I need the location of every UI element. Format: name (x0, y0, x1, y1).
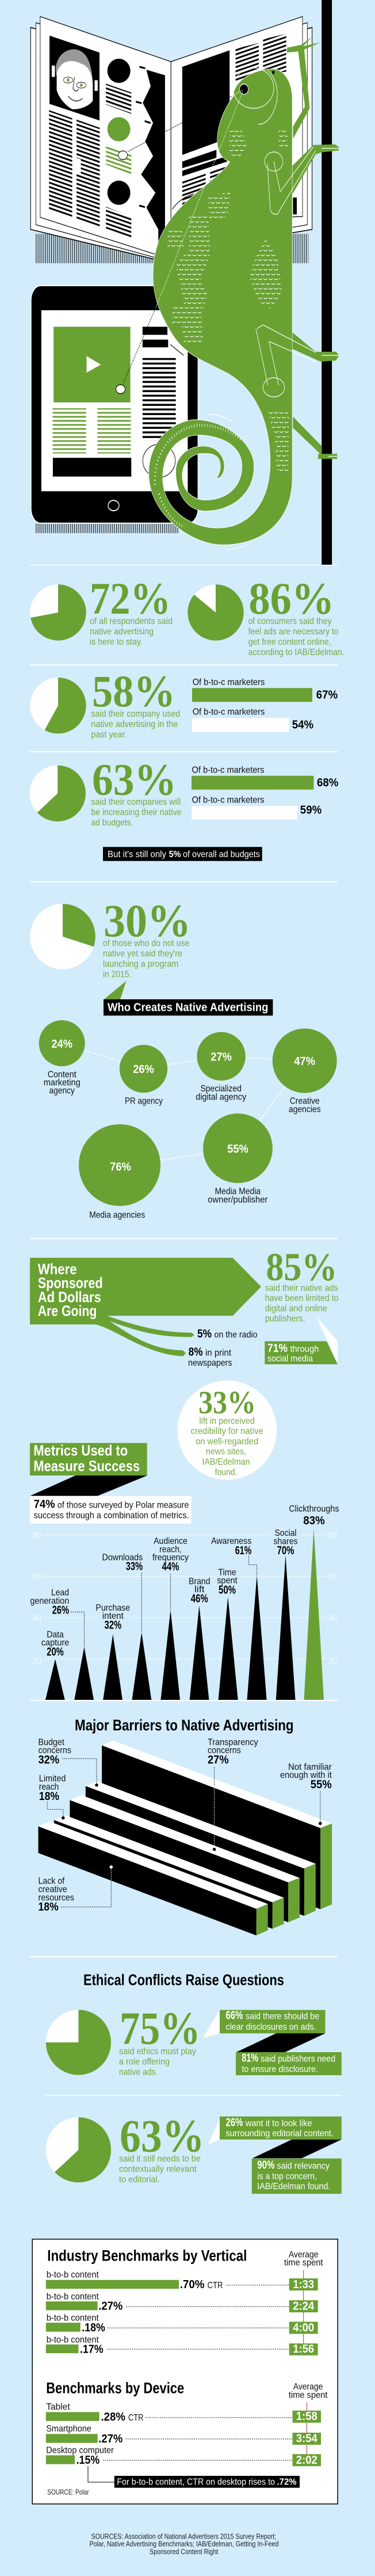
chart: isometric barrier steps: Not familiar (288, 1762, 332, 1772)
chart: metrics spikes: 40 (32, 1613, 41, 1623)
callouts: 26 and 90 percent: 90% (257, 2159, 275, 2172)
chart: isometric barrier steps: Lack of (38, 1877, 65, 1886)
callouts: 66 and 81 percent: 66% (225, 2010, 243, 2022)
industry benchmarks by vertical: 2:24 (293, 2300, 315, 2313)
chart: metrics spikes: Brand (189, 1577, 210, 1586)
bubble: PR agency: PR agency (125, 1096, 163, 1106)
benchmarks by device: Desktop computer (46, 2445, 114, 2455)
footer sources: Sponsored Content Right (150, 2547, 219, 2556)
stat bubble: 33 percent lift: IAB/Edelman (202, 1458, 250, 1467)
stat: 30 percent: in 2015. (103, 969, 131, 979)
stat: 72 percent: of all respondents said (90, 617, 173, 626)
bubble: media agencies: Media agencies (89, 1210, 145, 1220)
chart: metrics spikes: intent (102, 1611, 124, 1621)
label: 8 percent newspapers: newspapers (188, 1359, 232, 1368)
bubble: specialized digital agency (196, 1032, 246, 1102)
chart: isometric barrier steps: resources (38, 1893, 74, 1902)
chart: isometric barrier steps (38, 1737, 332, 1935)
industry benchmarks by vertical: b-to-b content (47, 2292, 99, 2301)
bubble: media owner/publisher: Media Media (215, 1187, 261, 1197)
stat: 72 percent: is here to stay. (90, 637, 143, 647)
callouts: 26 and 90 percent (208, 2116, 342, 2194)
stat: 63 percent relevance: contextually relevant (119, 2164, 197, 2174)
bubble: content marketing agency: marketing (44, 1078, 81, 1088)
callout: 74 percent: success through a combination of metrics. (34, 1511, 189, 1521)
stat: 85 percent: said their native ads (265, 1283, 338, 1293)
stat: 63 percent relevance: said it still needs to be (119, 2154, 201, 2164)
bubble connectors (85, 1051, 285, 1160)
bars: 67 and 54 percent: Of b-to-c marketers (193, 707, 265, 717)
chart: metrics spikes: reach, (159, 1544, 182, 1554)
chart: isometric barrier steps: concerns (208, 1746, 241, 1756)
stat: 75 percent ethics: a role offering (119, 2057, 170, 2067)
stat: 85 percent: publishers. (265, 1314, 305, 1324)
stat: 30 percent: launching a program (103, 959, 178, 969)
bubble: creative agencies: 47% (294, 1055, 315, 1068)
stat: 63 percent budgets: said their companies will (91, 797, 181, 807)
callouts: 26 and 90 percent: is a top concern, (257, 2171, 317, 2181)
stat: 72 percent (30, 573, 173, 647)
chart: metrics spikes: 61% (235, 1544, 252, 1557)
chart: metrics spikes: 26% (52, 1604, 69, 1616)
stat: 72 percent: native advertising (90, 627, 154, 637)
callouts: 26 and 90 percent: surrounding editorial content. (225, 2129, 334, 2139)
stat: 85 percent: have been limited to (265, 1293, 339, 1303)
industry benchmarks by vertical: time spent (284, 2258, 323, 2268)
benchmarks by device: Benchmarks by Device (46, 2379, 184, 2396)
callouts: 26 and 90 percent: want it to look like (245, 2118, 312, 2128)
chart: metrics spikes: Lead (51, 1588, 69, 1598)
chart: metrics spikes: generation (30, 1596, 69, 1606)
stat: 86 percent: feel ads are necessary to (248, 627, 339, 637)
bubble: media agencies: 76% (110, 1160, 131, 1173)
chart: metrics spikes: 60 (328, 1572, 337, 1581)
stat: 86 percent: according to IAB/Edelman. (248, 648, 345, 657)
chart: metrics spikes: 83% (303, 1515, 325, 1527)
industry benchmarks by vertical: CTR (207, 2281, 223, 2290)
industry benchmarks by vertical: b-to-b content (47, 2270, 99, 2280)
callout: 5 percent of budgets: But it's still only (108, 850, 166, 859)
chart: metrics spikes: 80 (328, 1531, 337, 1540)
benchmarks by device: 1:58 (296, 2410, 317, 2423)
bubble: media owner/publisher: 55% (227, 1143, 248, 1156)
stat: 63 percent budgets (29, 755, 181, 828)
industry benchmarks by vertical: .27% (98, 2300, 123, 2313)
tablet (31, 286, 198, 528)
chart: metrics spikes: 70% (277, 1544, 294, 1557)
industry benchmarks by vertical: 1:33 (293, 2278, 314, 2291)
chart: isometric barrier steps: reach (39, 1782, 59, 1792)
label: 8 percent newspapers (188, 1346, 232, 1368)
chart: metrics spikes: Clickthroughs (289, 1504, 339, 1514)
chart: metrics spikes: 46% (191, 1593, 208, 1605)
chart: isometric barrier steps: Limited (39, 1774, 66, 1784)
stat: 58 percent: native advertising in the (91, 720, 178, 729)
magazine (30, 17, 312, 259)
bubble: media owner/publisher: owner/publisher (208, 1195, 268, 1205)
bars: 67 and 54 percent: 54% (292, 718, 313, 731)
stat: 63 percent relevance: 63% (120, 2111, 205, 2162)
industry benchmarks by vertical: .70% (180, 2278, 205, 2291)
callout: 74 percent (30, 1496, 192, 1524)
bubble: PR agency (120, 1045, 167, 1106)
heading: ethical conflicts: Ethical Conflicts Raise Questions (83, 1971, 284, 1988)
footer sources: Polar, Native Advertising Benchmarks; IAB/Edelman, Getting In-Feed (90, 2540, 278, 2548)
bars: 67 and 54 percent: 67% (316, 688, 338, 701)
industry benchmarks by vertical: Average (289, 2250, 319, 2259)
bubble: media owner/publisher (203, 1113, 273, 1205)
bubble: specialized digital agency: digital agency (196, 1093, 246, 1102)
stat: 63 percent budgets: ad budgets. (91, 818, 133, 828)
callout: desktop CTR (88, 2466, 300, 2488)
stat bubble: 33 percent lift: on well-regarded (196, 1437, 258, 1447)
stat: 58 percent (30, 666, 180, 740)
chart: isometric barrier steps: 55% (311, 1779, 332, 1791)
chart: isometric barrier steps: creative (38, 1885, 67, 1894)
label: 8 percent newspapers: 8% (189, 1346, 203, 1359)
industry benchmarks by vertical: 4:00 (293, 2322, 314, 2334)
stat: 72 percent: 72% (90, 573, 171, 623)
benchmarks by device: Average (293, 2382, 323, 2392)
chart: isometric barrier steps: concerns (38, 1746, 71, 1756)
callout: 5 percent of budgets: 5% (169, 850, 181, 859)
callout: desktop CTR: .72% (277, 2478, 297, 2487)
chart: metrics spikes (30, 1504, 339, 1701)
bubble: media agencies (79, 1124, 160, 1220)
stat: 63 percent relevance (46, 2111, 205, 2185)
benchmarks by device (46, 2379, 328, 2467)
chart: metrics spikes: Data (47, 1630, 64, 1639)
bars: 68 and 59 percent (192, 766, 339, 820)
chart: isometric barrier steps: 18% (39, 1790, 59, 1803)
stat: 30 percent (30, 896, 191, 999)
callouts: 66 and 81 percent: 81% (242, 2052, 258, 2065)
stat: 75 percent ethics (46, 2004, 201, 2077)
callouts: 26 and 90 percent: said relevancy (277, 2162, 330, 2171)
bars: 68 and 59 percent: Of b-to-c marketers (192, 766, 265, 775)
stat: 30 percent: of those who do not use (103, 938, 190, 948)
stat: 85 percent (265, 1245, 339, 1324)
chart: metrics spikes: Purchase (96, 1603, 130, 1613)
stat: 63 percent budgets: be increasing their native (91, 808, 181, 817)
footer sources (90, 2532, 278, 2556)
chart: metrics spikes: 20 (328, 1656, 337, 1665)
chart: isometric barrier steps: Budget (38, 1737, 64, 1747)
stat: 75 percent ethics: said ethics must play (119, 2046, 196, 2056)
callout: 71 percent social media: 71% (267, 1342, 288, 1354)
callouts: 66 and 81 percent: said there should be (246, 2012, 319, 2022)
callout: 71 percent social media (265, 1316, 338, 1364)
stat: 63 percent budgets: 63% (92, 755, 177, 805)
heading: who creates native advertising: Who Creates Native Advertising (108, 1002, 268, 1014)
stat: 86 percent: of consumers said they (248, 617, 332, 626)
stat: 85 percent: digital and online (265, 1304, 327, 1314)
chart: metrics spikes: 80 (32, 1531, 41, 1540)
benchmarks by device: time spent (289, 2390, 328, 2400)
footer sources: SOURCES: Association of National Advertisers 2015 Survey Report; (91, 2532, 276, 2540)
bubble: content marketing agency: agency (49, 1086, 75, 1096)
callout: desktop CTR: For b-to-b content, CTR on desktop rises to (117, 2478, 275, 2487)
industry benchmarks by vertical: .17% (80, 2343, 104, 2356)
chart: metrics spikes: spent (217, 1576, 238, 1586)
benchmarks by device: .15% (76, 2454, 100, 2467)
stat: 30 percent: 30% (104, 896, 191, 947)
chart: isometric barrier steps: 32% (38, 1753, 59, 1766)
industry benchmarks by vertical: b-to-b content (47, 2314, 99, 2323)
label: 5 percent radio: on the radio (214, 1330, 258, 1340)
callout: 71 percent social media: through (290, 1344, 319, 1354)
arrow: where sponsored ad dollars are going: Sponsored (38, 1274, 103, 1292)
bars: 67 and 54 percent (192, 678, 338, 732)
callouts: 66 and 81 percent: clear disclosures on ads. (225, 2022, 316, 2032)
chart: isometric barrier steps: 18% (38, 1901, 59, 1913)
industry benchmarks by vertical: .18% (82, 2322, 105, 2334)
pole (322, 0, 332, 565)
bubble: PR agency: 26% (133, 1063, 154, 1076)
chart: isometric barrier steps: 27% (208, 1753, 229, 1766)
chart: metrics spikes: Downloads (102, 1553, 143, 1562)
chart: metrics spikes: 20% (47, 1646, 64, 1658)
chart: isometric barrier steps: Transparency (208, 1737, 258, 1747)
benchmarks by device: CTR (128, 2413, 144, 2423)
stat bubble: 33 percent lift: lift in perceived (199, 1416, 255, 1426)
stat bubble: 33 percent lift (177, 1380, 277, 1480)
callout: 5 percent of budgets (103, 847, 262, 861)
benchmarks by device: 2:02 (296, 2454, 317, 2467)
bars: 68 and 59 percent: Of b-to-c marketers (192, 795, 265, 805)
chart: metrics spikes: 60 (32, 1572, 41, 1581)
benchmarks by device: .28% (101, 2411, 125, 2423)
bars: 68 and 59 percent: 68% (317, 777, 339, 789)
stat bubble: 33 percent lift: news sites, (206, 1447, 246, 1457)
arrow: where sponsored ad dollars are going (30, 1258, 261, 1356)
industry benchmarks by vertical: 1:56 (293, 2343, 314, 2356)
callouts: 66 and 81 percent: said publishers need (261, 2054, 335, 2064)
stat: 63 percent relevance: to editorial. (119, 2175, 160, 2185)
chart: metrics spikes: Awareness (211, 1536, 251, 1546)
bars: 67 and 54 percent: Of b-to-c marketers (193, 678, 265, 687)
callouts: 66 and 81 percent: to ensure disclosure. (242, 2064, 318, 2074)
chart: metrics spikes: 32% (105, 1619, 121, 1631)
stat bubble: 33 percent lift: found. (215, 1468, 237, 1478)
bubble: content marketing agency: 24% (51, 1038, 72, 1051)
stat: 75 percent ethics: 75% (120, 2004, 200, 2054)
stat bubble: 33 percent lift: 33% (198, 1385, 256, 1421)
chart: metrics spikes: Social (275, 1528, 297, 1538)
callouts: 26 and 90 percent: 26% (225, 2116, 243, 2129)
chart: metrics spikes: 50% (219, 1584, 236, 1596)
bubble: specialized digital agency: 27% (211, 1051, 232, 1063)
callout: 71 percent social media: social media (267, 1354, 313, 1364)
stat: 85 percent: 85% (266, 1245, 337, 1289)
stat: 86 percent: 86% (248, 573, 334, 623)
bubble: content marketing agency (39, 1020, 85, 1096)
bubble: specialized digital agency: Specialized (200, 1084, 242, 1094)
bubble: creative agencies: agencies (289, 1105, 321, 1114)
chart: metrics spikes: shares (274, 1536, 298, 1546)
stat bubble: 33 percent lift: credibility for native (191, 1426, 263, 1436)
stat: 58 percent: 58% (92, 666, 175, 716)
benchmarks by device: 3:54 (296, 2433, 318, 2445)
label: 8 percent newspapers: in print (205, 1348, 232, 1358)
source: Polar: SOURCE: Polar (47, 2487, 89, 2496)
industry benchmarks by vertical: Industry Benchmarks by Vertical (47, 2247, 247, 2265)
heading: metrics used to measure success: Measure Success (33, 1457, 140, 1474)
stat: 58 percent: past year. (91, 730, 127, 740)
chart: metrics spikes: Time (218, 1567, 236, 1577)
chart: metrics spikes: 40 (328, 1613, 337, 1623)
label: 5 percent radio: 5% (197, 1327, 212, 1340)
chameleon (149, 37, 339, 550)
callout: 74 percent: 74% (34, 1498, 55, 1510)
benchmarks by device: .27% (98, 2433, 123, 2445)
callouts: 66 and 81 percent (203, 2010, 342, 2075)
chart: metrics spikes: lift (194, 1585, 205, 1595)
arrow: where sponsored ad dollars are going: Where (38, 1260, 77, 1277)
heading: major barriers: Major Barriers to Native Advertising (75, 1717, 294, 1734)
callouts: 26 and 90 percent: IAB/Edelman found. (257, 2182, 330, 2191)
chart: isometric barrier steps: enough with it (280, 1771, 332, 1780)
sight lines and targets (116, 90, 243, 394)
stat: 75 percent ethics: native ads. (119, 2067, 158, 2077)
stat: 86 percent: get free content online, (248, 637, 331, 647)
chart: metrics spikes: capture (41, 1638, 69, 1648)
label: 5 percent radio (197, 1327, 258, 1340)
arrow: where sponsored ad dollars are going: Ad Dollars (38, 1288, 101, 1306)
callout: 74 percent: of those surveyed by Polar measure (58, 1500, 189, 1510)
benchmarks by device: Tablet (46, 2402, 70, 2412)
stat: 58 percent: said their company used (91, 709, 180, 719)
chart: metrics spikes: frequency (152, 1553, 189, 1562)
callout: 5 percent of budgets: of overall ad budgets (183, 850, 260, 859)
bubble: creative agencies: Creative (290, 1097, 320, 1106)
stat: 86 percent (188, 573, 345, 657)
chart: metrics spikes: 44% (162, 1561, 179, 1573)
bars: 68 and 59 percent: 59% (300, 804, 322, 816)
industry benchmarks by vertical (46, 2247, 323, 2356)
chart: metrics spikes: Audience (154, 1536, 188, 1546)
panel: benchmarks (32, 2239, 338, 2504)
chart: metrics spikes: 20 (32, 1656, 41, 1665)
arrow: where sponsored ad dollars are going: Are Going (38, 1302, 97, 1319)
heading: metrics used to measure success (30, 1442, 147, 1496)
benchmarks by device: Smartphone (46, 2424, 91, 2434)
hero illustration: chameleon reading magazine and tablet (30, 0, 339, 565)
heading: metrics used to measure success: Metrics Used to (33, 1442, 128, 1459)
bubble: content marketing agency: Content (48, 1070, 76, 1079)
industry benchmarks by vertical: b-to-b content (47, 2335, 99, 2345)
chart: metrics spikes: 33% (126, 1561, 143, 1573)
bubble: creative agencies (273, 1029, 337, 1114)
stat: 30 percent: native yet said they're (103, 949, 182, 958)
